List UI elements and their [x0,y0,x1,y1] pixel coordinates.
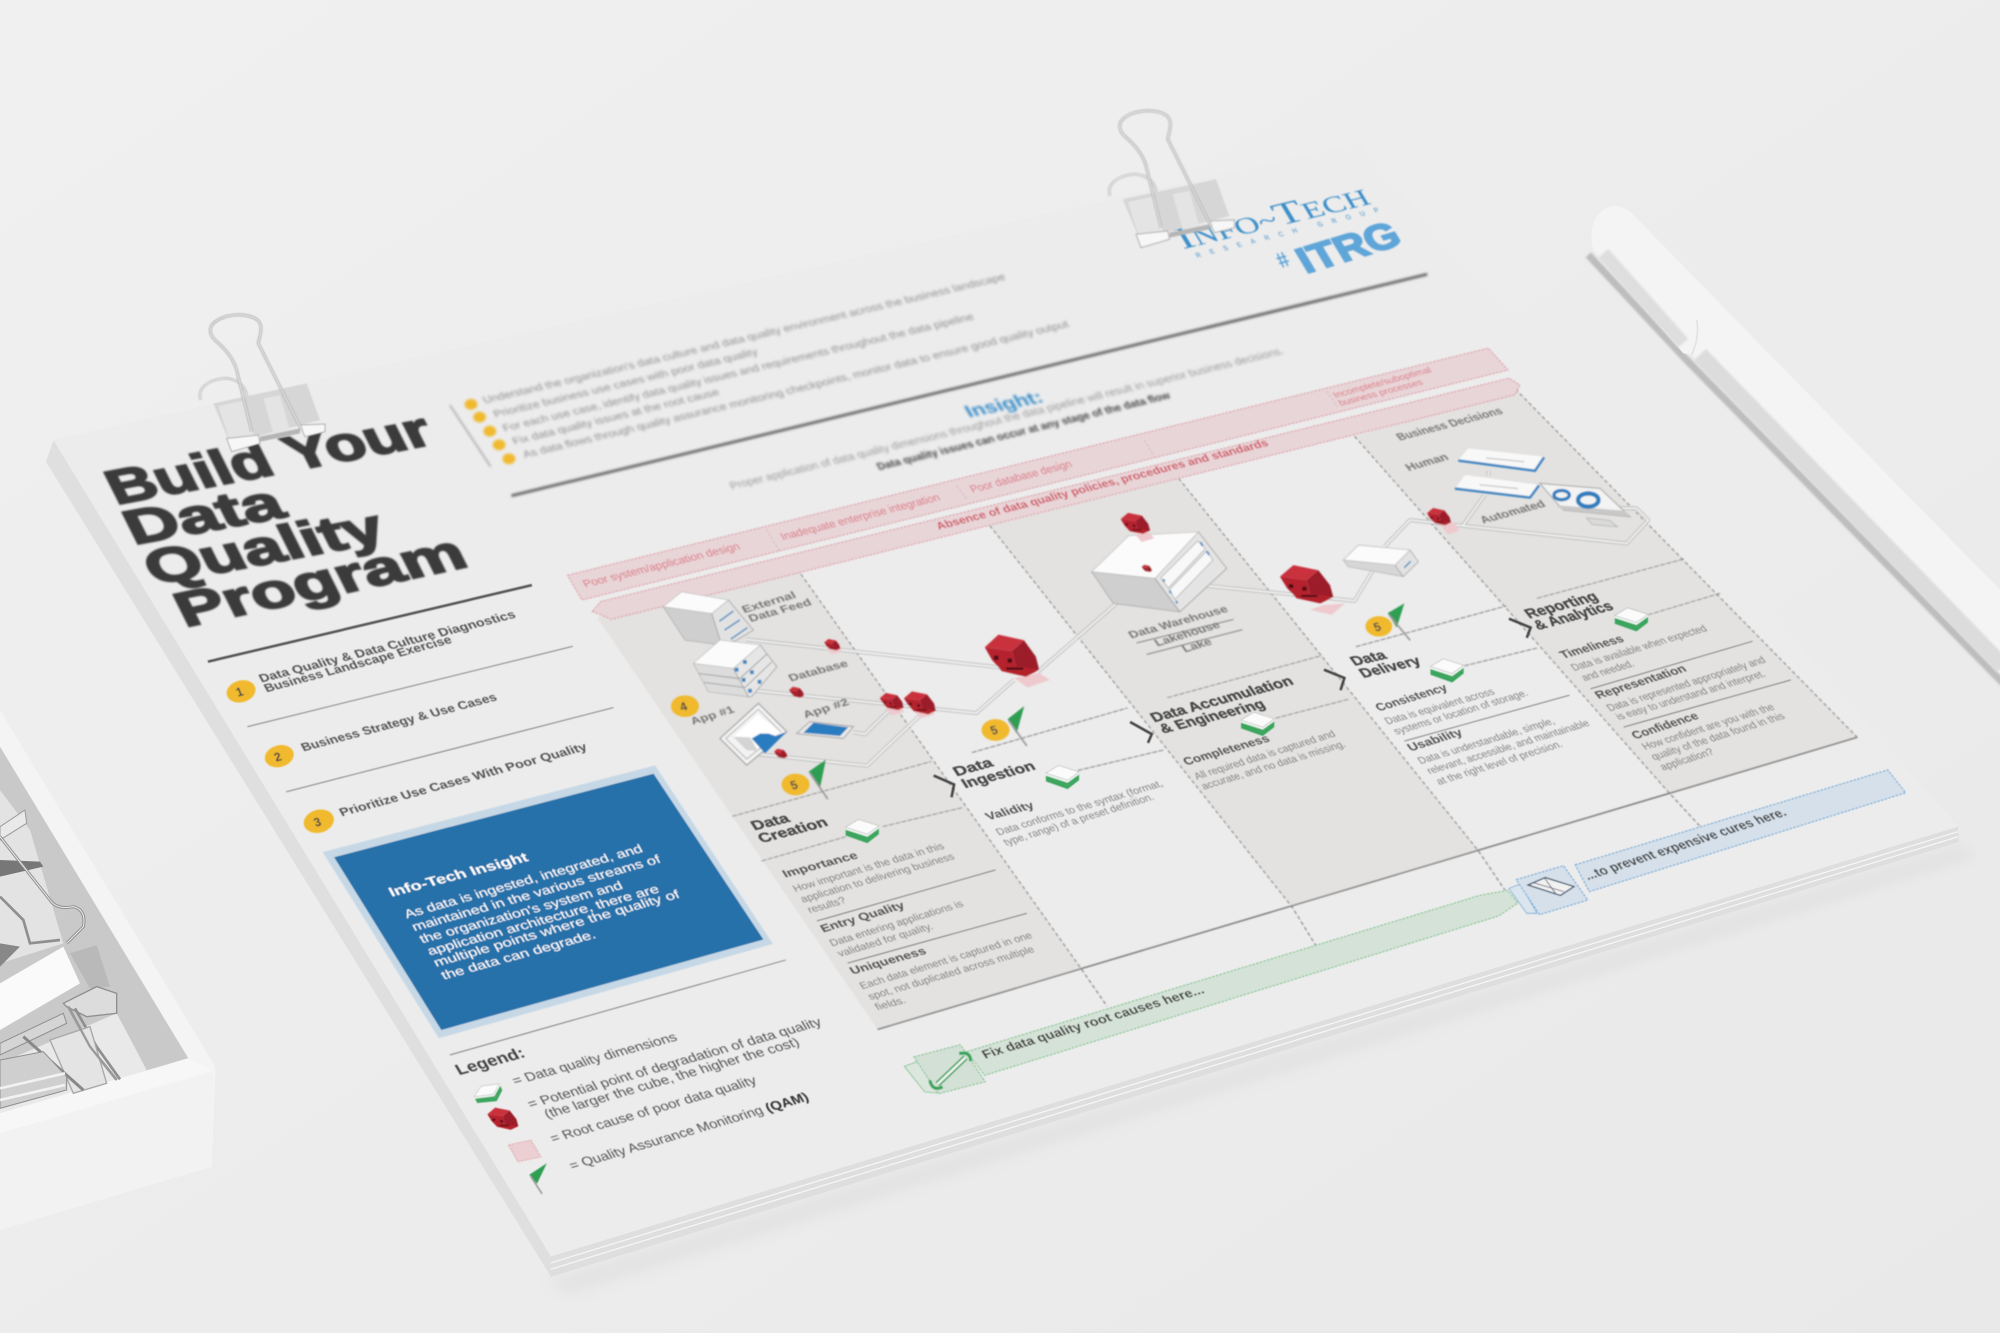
icon: app 1 [720,703,787,765]
stage: Data Creation: fields. [873,995,909,1013]
stage: Data Ingestion: Validity [983,800,1038,823]
system labels: Automated [1477,498,1549,526]
panel: Info-Tech Insight [323,765,773,1038]
system labels: Business Decisions [1394,406,1506,443]
band: absence of policies [592,378,1520,619]
stage: Data Ingestion: type, range) of a preset definition. [1001,792,1157,848]
step 1: Data Quality & Data Culture Diagnostics [257,609,518,685]
callout: fix root causes [904,890,1518,1094]
stage: Data Creation: spot, not duplicated across multiple [866,944,1037,1003]
panel: Info-Tech Insight: As data is ingested, integrated, and [401,842,645,921]
red root-cause bands: Absence of data quality policies, procedures and standards [934,437,1271,532]
step 3 [301,741,590,836]
stage: Data Accumulation and Engineering: Data Accumulation [1147,673,1296,725]
stage: Data Creation: Each data element is captured in one [858,930,1035,992]
stage: Reporting and Analytics: Data is available when expected [1569,624,1710,674]
stage: Data Delivery [1346,647,1593,788]
legend: = Root cause of poor data quality [547,1073,760,1146]
stage: Data Creation: validated for quality. [836,921,936,960]
system labels: Data Feed [747,597,814,625]
yellow QAM markers and flags [671,603,1410,799]
yellow QAM markers and flags: 5 [1371,619,1383,634]
red root-cause bands [568,348,1520,619]
system labels: Database [786,658,851,684]
red root-cause bands: Inadequate enterprise integration [778,492,943,543]
logo: ITRG: ITRG [1288,214,1408,281]
red root-cause bands: business processes [1336,377,1426,408]
header objectives list: Fix data quality issues at the root cause [510,387,722,447]
yellow QAM markers and flags: 5 [788,778,800,793]
header objectives list: For each use case, identify data quality issues and requirements throughout the data pipeline [501,312,977,434]
stage: Data Delivery: relevant, accessible, and maintainable [1425,718,1593,777]
stage: Data Creation: Importance [780,850,861,880]
legend: root cause square [509,1140,541,1162]
stage: Data Delivery: Consistency [1373,682,1451,714]
stage: Reporting and Analytics: Confidence [1629,710,1702,742]
stage: Data Creation: Uniqueness [847,945,929,977]
header objectives list: As data flows through quality assurance monitoring checkpoints, monitor data to ensure good quality output [521,319,1071,461]
system labels: Lake [1180,637,1215,655]
system labels: App #2 [801,697,852,721]
legend: = Potential point of degradation of data quality [525,1015,825,1111]
icon: wrench [930,1053,971,1088]
legend: dimensions icon [471,1079,505,1109]
stage: Data Creation: application to delivering business [798,852,957,905]
stage: Data Accumulation and Engineering: Completeness [1181,733,1273,768]
pink root-cause squares [827,522,1459,718]
stage: Reporting and Analytics: How confident are you with the [1640,702,1778,753]
legend [450,960,825,1194]
icon: prevention panel [1528,878,1574,895]
icon: delivery box [1343,545,1418,577]
stage: Reporting and Analytics: quality of the data found in this [1649,711,1788,763]
logo: Info-Tech: RESEARCH GROUP [1194,207,1381,260]
step 2: Business Strategy & Use Cases [299,692,499,754]
step 2 [262,692,499,770]
stage: Reporting and Analytics: Reporting [1520,588,1602,621]
stage: Data Delivery: systems or location of storage. [1391,688,1531,737]
panel: Info-Tech Insight: multiple points where the quality of [431,887,683,970]
stage: Data Accumulation and Engineering [1147,673,1348,792]
yellow QAM markers and flags: 4 [678,699,690,714]
icon: external data feed server [663,592,753,645]
red root-cause bands: Incomplete/suboptimal [1331,365,1433,400]
stage: Reporting and Analytics: Representation [1592,663,1690,702]
step 1 [224,609,518,706]
stage: Data Accumulation and Engineering: All required data is captured and [1192,729,1338,782]
system labels: App #1 [689,705,737,728]
stage: Data Accumulation and Engineering: & Engineering [1156,697,1268,736]
legend: = Quality Assurance Monitoring (QAM) [566,1090,812,1173]
panel: Info-Tech Insight: the organization's system and [417,878,625,946]
logo: Info-Tech: INFO~ TECH [1167,177,1376,256]
header objectives list [450,272,1427,496]
yellow QAM markers and flags: 5 [988,723,1000,738]
legend: QAM flag [529,1163,547,1194]
bottom callouts [904,770,1906,1094]
stage: Data Ingestion: Data [950,755,997,779]
logo: ITRG [1270,214,1408,281]
band: root causes [568,348,1508,600]
stage: Reporting and Analytics: and needed. [1579,659,1637,684]
step 3: Prioritize Use Cases With Poor Quality [337,741,590,819]
panel: grey columns and stage lines [597,389,1857,1029]
stage: Data Accumulation and Engineering: accurate, and no data is missing. [1199,739,1348,792]
stage: Data Creation: results? [805,895,849,916]
header objectives list: Prioritize business use cases with poor data quality [492,347,760,420]
binder clip: left [200,315,325,452]
stage: Reporting and Analytics: Data is represented appropriately and [1605,655,1769,714]
title: Quality [134,500,395,595]
stage: Data Creation: Creation [754,815,831,846]
title: Build Your [96,403,441,515]
red root-cause bands: Poor database design [968,458,1075,496]
step 3: 3 [312,815,323,830]
stage: Data Creation: Data [747,811,793,833]
title: Data [114,476,294,555]
stage: Data Ingestion [950,755,1166,848]
stage: Reporting and Analytics: Timeliness [1557,634,1627,661]
step 1: 1 [234,685,246,699]
step 2: 2 [272,750,284,765]
red root-cause bands: Poor system/application design [581,541,743,590]
pen [1588,206,2000,683]
insight statement: Insight: [960,387,1047,421]
stage: Data Delivery: Data is equivalent across [1383,687,1497,727]
title [96,403,476,637]
legend: (the larger the cube, the higher the cost) [541,1035,802,1121]
icon: data warehouse [1092,532,1227,612]
red degradation cubes [774,508,1451,758]
stage: Data Delivery: at the right level of precision. [1434,739,1565,788]
panel: Info-Tech Insight: the data can degrade. [438,927,598,982]
sidebar [96,403,773,1038]
panel: Info-Tech Insight: Info-Tech Insight [386,849,532,899]
insight statement: Proper application of data quality dimensions throughout the data pipeline will result in superior business decisions. [728,346,1286,492]
stage: Data Ingestion: Data conforms to the syntax (format, [994,779,1166,838]
stage: Reporting and Analytics: is easy to understand and interpret. [1614,669,1769,723]
system labels: Human [1403,452,1452,474]
panel: Info-Tech Insight: maintained in the various streams of [409,852,664,934]
stage: Data Creation: Entry Quality [818,900,907,935]
stage: Data Delivery: Delivery [1355,653,1424,681]
stage: Data Delivery: Data is understandable, simple, [1416,716,1558,767]
system labels: External [740,590,799,616]
stage: Data Creation [747,811,1037,1013]
icon: human decision cards [1455,448,1544,497]
binder clip: right [1109,111,1234,248]
legend: = Data quality dimensions [509,1030,680,1088]
logos [1167,177,1408,281]
title: Program [164,525,476,637]
pipeline stages [747,588,1791,1013]
stage: Reporting and Analytics: & Analytics [1529,598,1617,633]
legend: degradation cube icon [487,1108,518,1130]
tray of binder clips [0,710,216,1230]
system labels [689,406,1549,728]
stage: Data Creation: How important is the data in this [791,841,947,895]
pipelines [735,471,1648,766]
data flow diagram [663,406,1648,799]
stage: Data Ingestion: Ingestion [958,758,1038,791]
system labels: Data Warehouse [1126,604,1231,641]
icon: app 2 [797,722,853,738]
icon: database server [693,640,777,697]
callout: fix root causes: Fix data quality root causes here... [979,983,1207,1061]
panel: Info-Tech Insight: application architecture, there are [424,882,662,958]
stage: Data Delivery: Data [1346,647,1390,668]
step 1: Business Landscape Exercise [262,634,455,695]
stage: Reporting and Analytics [1520,588,1791,773]
header objectives list: Understand the organization's data culture and data quality environment across the business landscape [481,272,1008,406]
callout: prevent expensive cures: ...to prevent expensive cures here. [1580,805,1790,883]
stage: Data Creation: Data entering applications is [828,899,966,949]
insight statement: Data quality issues can occur at any stage of the data flow [875,390,1174,473]
stage chevrons [934,619,1531,797]
system labels: Lakehouse [1153,620,1223,649]
logo: ITRG: # [1270,247,1296,272]
icon: automated monitor with gears [1540,483,1630,527]
legend: Legend: [452,1045,529,1079]
stage: Reporting and Analytics: application? [1658,747,1717,773]
stage: Data Delivery: Usability [1405,727,1466,754]
callout: prevent expensive cures [1509,770,1906,915]
logo: Info-Tech [1167,177,1381,260]
